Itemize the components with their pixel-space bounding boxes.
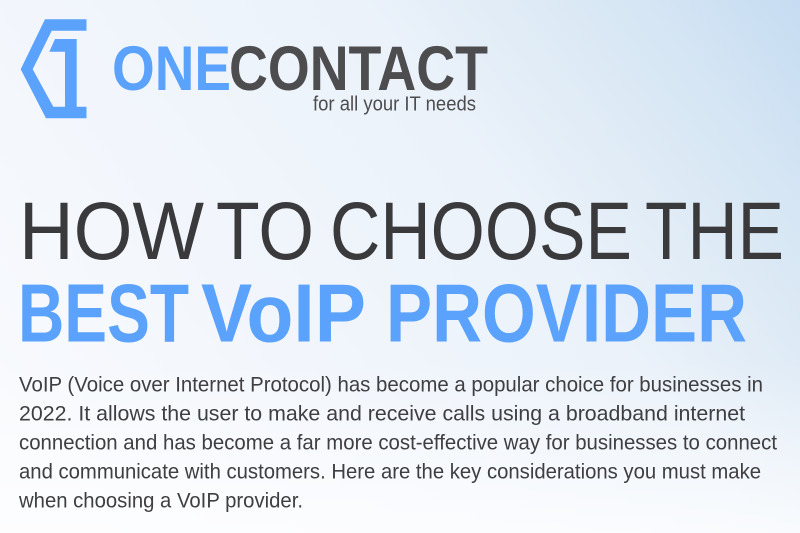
intro paragraph: connection and has become a far more cost-effective way for businesses to connect: [19, 432, 777, 454]
title line 1: [19, 186, 784, 277]
intro paragraph: and communicate with customers. Here are the key considerations you must make: [19, 460, 761, 484]
intro paragraph: when choosing a VoIP provider.: [18, 490, 303, 512]
title line 1: CHOOSE: [330, 186, 632, 277]
icon: logo bracket and numeral one: [21, 19, 87, 118]
brand name: ONE: ONE: [112, 34, 231, 104]
title line 1: TO: [216, 186, 314, 277]
brand name: CONTACT: CONTACT: [229, 34, 488, 104]
intro paragraph: [18, 374, 777, 512]
title line 2: VoIP: [201, 266, 366, 360]
logo: [21, 19, 488, 118]
title: [18, 186, 784, 360]
tagline: for all your IT needs: [313, 92, 476, 116]
intro paragraph: 2022. It allows the user to make and receive calls using a broadband internet: [19, 402, 745, 426]
title line 2: [18, 266, 747, 360]
title line 2: BEST: [18, 266, 189, 360]
intro paragraph: VoIP (Voice over Internet Protocol) has become a popular choice for businesses in: [19, 374, 763, 396]
title line 1: HOW: [19, 186, 205, 277]
